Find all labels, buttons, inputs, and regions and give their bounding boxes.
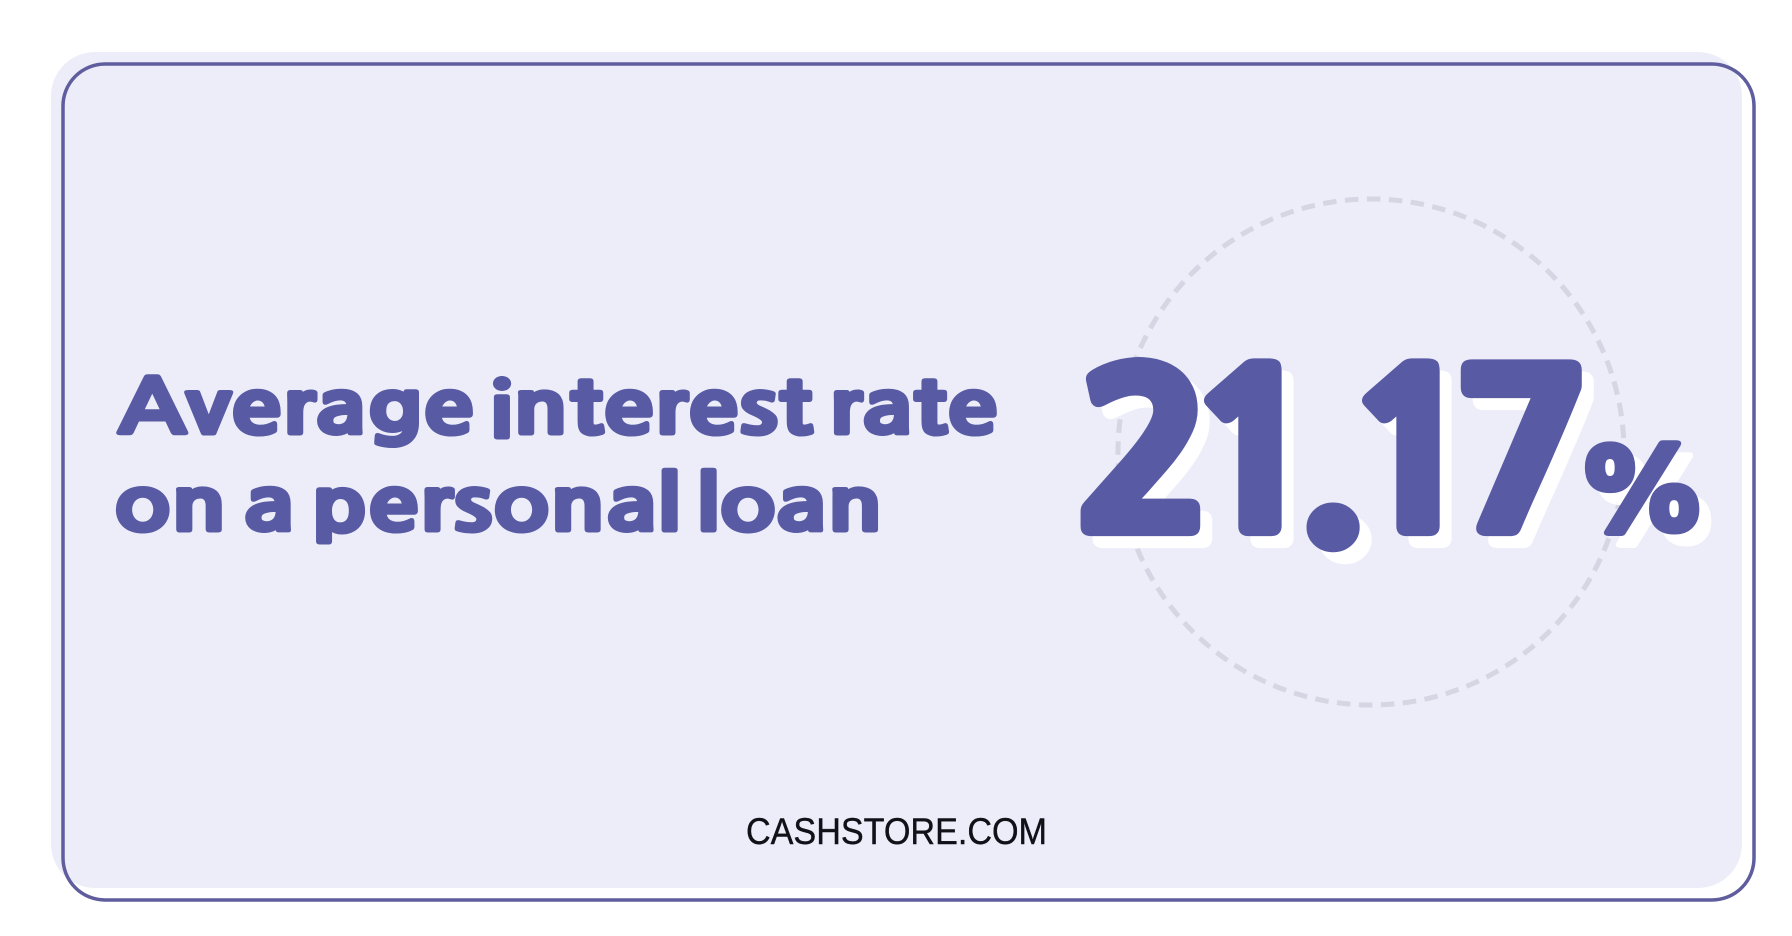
number 21.17: 21.17	[1074, 347, 1592, 562]
big statistic: 21.17% with white offset shadow	[1074, 347, 1709, 562]
dashed circle behind the number	[1118, 199, 1624, 705]
percent sign: %	[1573, 437, 1709, 549]
heading: average interest rate on a personal loan: on a personal loan	[114, 467, 884, 543]
heading: average interest rate on a personal loan	[114, 370, 998, 543]
source: cashstore.com: CASHSTORE.COM	[746, 811, 1047, 852]
heading: average interest rate on a personal loan: Average interest rate	[117, 370, 998, 446]
